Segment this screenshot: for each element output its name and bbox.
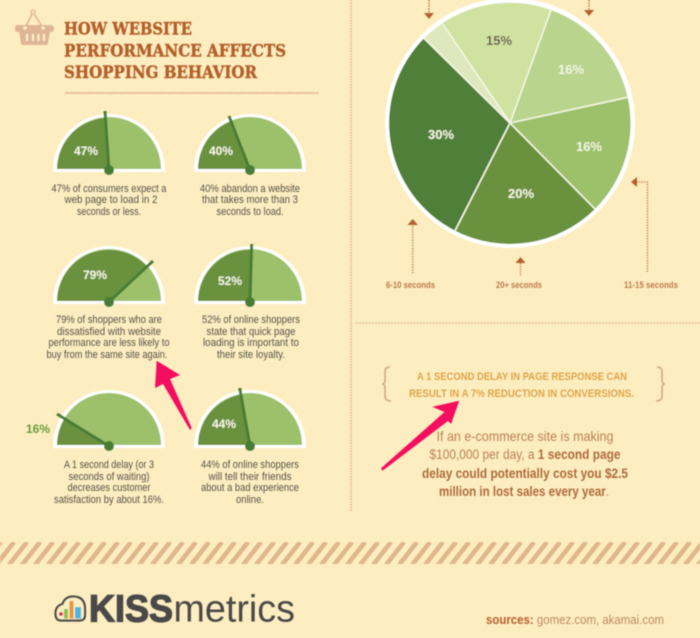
arrow: 6-10 seconds <box>408 219 418 274</box>
text block: lost sales: If an e-commerce site is making <box>436 429 614 444</box>
caption: 16%: seconds of waiting) <box>68 471 150 483</box>
arrow: pink pointing to callout <box>381 401 459 471</box>
text block: lost sales <box>422 429 628 499</box>
text block: lost sales: $100,000 per day, a 1 second page <box>430 447 621 462</box>
caption: 47%: seconds or less. <box>77 206 141 218</box>
caption: 44%: about a bad experience <box>201 482 299 494</box>
caption: 47%: web page to load in 2 <box>64 194 158 206</box>
sources: sources: gomez.com, akamai.com <box>486 613 664 627</box>
gauge: 79% dissatisfied: 79% <box>83 268 107 282</box>
arrow: 20+ seconds <box>516 257 526 276</box>
pie chart: 16% <box>576 139 602 154</box>
arrow: 11-15 seconds <box>631 177 648 273</box>
text block: lost sales: million in lost sales every year. <box>439 484 609 499</box>
icon: shopping basket <box>15 10 54 45</box>
caption: 52%: state that quick page <box>206 326 296 338</box>
caption: 44%: will tell their friends <box>208 471 292 483</box>
pie chart: 16% <box>558 62 584 77</box>
logo: KISSmetrics: metrics <box>174 588 295 630</box>
caption: 52%: loading is important to <box>203 337 299 349</box>
logo: KISSmetrics: KISS <box>89 588 173 630</box>
caption: 52% <box>202 314 300 361</box>
title: SHOPPING BEHAVIOR <box>64 63 258 83</box>
gauge: 16% satisfaction <box>26 390 165 451</box>
text block: lost sales: delay could potentially cost you $2.5 <box>422 466 628 481</box>
gauge: 16% satisfaction: 16% <box>26 422 50 436</box>
caption: 40%: seconds to load. <box>216 206 284 218</box>
title: HOW WEBSITE <box>64 19 192 39</box>
pie chart <box>385 0 635 248</box>
gauge: 44% tell friends: 44% <box>212 417 236 431</box>
label: 20+ seconds: 20+ seconds <box>496 280 542 290</box>
stripe band <box>0 542 700 564</box>
label: 6-10 seconds: 6-10 seconds <box>386 280 435 290</box>
gauge: 52% online shoppers: 52% <box>218 274 242 288</box>
gauge: 40% abandon <box>194 114 306 175</box>
caption: 40%: 40% abandon a website <box>200 183 300 195</box>
gauge: 47% of consumers <box>53 111 165 175</box>
arrow: top right <box>584 0 594 16</box>
caption: 52%: their site loyalty. <box>217 349 285 361</box>
caption: 16% <box>54 459 164 506</box>
title: PERFORMANCE AFFECTS <box>64 42 286 62</box>
callout: 7% reduction in conversions: A 1 SECOND DELAY IN PAGE RESPONSE CAN <box>417 371 627 383</box>
logo: KISSmetrics <box>56 588 295 630</box>
caption: 47% <box>52 183 167 218</box>
caption: 40% <box>200 183 300 218</box>
gauge: 40% abandon: 40% <box>209 144 233 158</box>
caption: 16%: satisfaction by about 16%. <box>54 494 164 506</box>
callout: 7% reduction in conversions <box>382 367 665 401</box>
label: 11-15 seconds: 11-15 seconds <box>624 280 678 290</box>
gauge: 79% dissatisfied <box>53 246 165 307</box>
caption: 47%: 47% of consumers expect a <box>52 183 167 195</box>
caption: 40%: that takes more than 3 <box>202 194 298 206</box>
caption: 16%: A 1 second delay (or 3 <box>64 459 154 471</box>
caption: 79% <box>46 314 170 361</box>
gauge: 52% online shoppers <box>194 244 306 307</box>
callout: 7% reduction in conversions: RESULT IN A 7% REDUCTION IN CONVERSIONS. <box>409 388 634 400</box>
caption: 16%: decreases customer <box>68 482 151 494</box>
caption: 79%: 79% of shoppers who are <box>56 314 162 326</box>
caption: 44%: 44% of online shoppers <box>201 459 299 471</box>
caption: 79%: buy from the same site again. <box>46 349 168 361</box>
caption: 52%: 52% of online shoppers <box>202 314 300 326</box>
caption: 79%: performance are less likely to <box>48 337 170 349</box>
gauge: 44% tell friends <box>194 388 306 451</box>
arrow: pink pointing to 79% caption <box>155 361 192 430</box>
pie chart: 20% <box>508 186 534 201</box>
caption: 44% <box>201 459 299 506</box>
caption: 44%: online. <box>236 494 264 506</box>
gauge: 47% of consumers: 47% <box>74 144 98 158</box>
caption: 79%: dissatisfied with website <box>57 326 161 338</box>
pie chart: 15% <box>486 33 512 48</box>
icon: heart chart <box>56 596 85 620</box>
pie chart: 30% <box>428 127 454 142</box>
title <box>64 19 286 83</box>
arrow: top left <box>424 0 434 19</box>
